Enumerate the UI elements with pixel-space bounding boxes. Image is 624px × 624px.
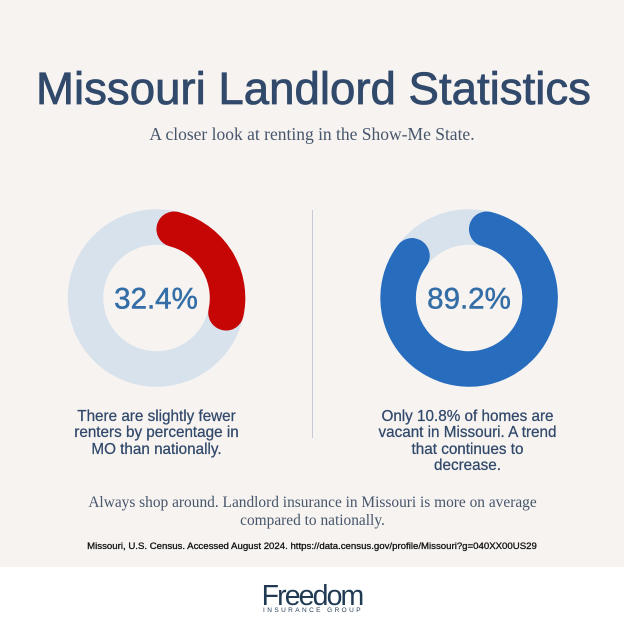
right caption: vacant in Missouri. A trend	[378, 424, 556, 441]
logo wordmark: Freedom	[262, 580, 362, 612]
right caption: Only 10.8% of homes are	[381, 408, 554, 425]
left caption: renters by percentage in	[74, 424, 239, 441]
right caption	[378, 408, 556, 474]
title: Missouri Landlord Statistics	[36, 63, 591, 114]
divider	[312, 210, 313, 438]
donut chart: 32.4%: 32.4%	[114, 282, 198, 316]
donut chart: 89.2%: 89.2%	[427, 282, 511, 316]
note text	[88, 494, 537, 529]
right caption: that continues to	[412, 441, 523, 458]
left caption	[74, 408, 239, 458]
right caption: decrease.	[434, 457, 501, 474]
logo tagline: INSURANCE GROUP	[263, 607, 363, 614]
note text: Always shop around. Landlord insurance in Missouri is more on average	[88, 494, 537, 511]
source citation: Missouri, U.S. Census. Accessed August 2024. https://data.census.gov/profile/Missouri?g=040XX00US29	[87, 541, 537, 552]
subtitle: A closer look at renting in the Show-Me State.	[149, 124, 475, 144]
donut chart: 89.2%	[380, 209, 558, 387]
logo: Freedom Insurance Group	[262, 580, 363, 614]
left caption: MO than nationally.	[91, 441, 222, 458]
note text: compared to nationally.	[240, 512, 385, 529]
left caption: There are slightly fewer	[77, 408, 236, 425]
donut chart: 32.4%	[68, 209, 246, 387]
